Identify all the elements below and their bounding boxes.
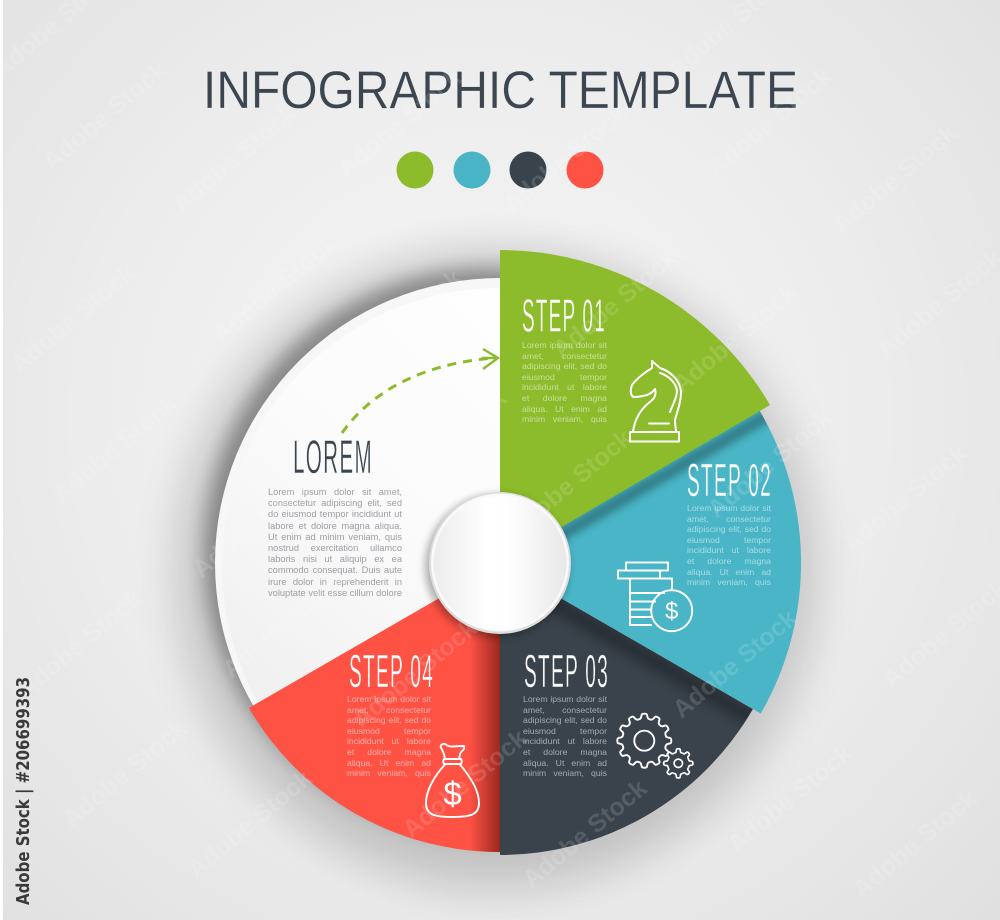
panel: step 04 (249, 598, 500, 852)
watermarks: Adobe Stock (377, 384, 512, 504)
text block: lorem: Lorem ipsum dolor sit amet, (268, 487, 402, 497)
text block: step 01: et dolore magna (522, 393, 607, 403)
text block: step 01: eiusmod tempor (522, 372, 607, 382)
text block: step 01: amet, consectetur (522, 351, 607, 361)
watermarks: Adobe Stock (497, 99, 632, 219)
text block: step 04: minim veniam, quis (347, 768, 431, 778)
watermarks: Adobe Stock (5, 259, 140, 379)
text block: lorem: Ut enim ad minim veniam, quis (268, 532, 402, 542)
text block: step 04: incididunt ut labore (347, 736, 431, 746)
text block: step 01 (522, 340, 607, 427)
watermarks: Adobe Stock (182, 764, 317, 884)
text block: step 03: amet, consectetur (523, 705, 607, 715)
text block: step 01: aliqua. Ut enim ad (522, 404, 607, 414)
title: INFOGRAPHIC TEMPLATE (203, 61, 798, 120)
watermarks: Adobe Stock (667, 279, 802, 399)
text block: step 04: adipiscing elit, sed do (347, 715, 431, 725)
colour dots (396, 152, 604, 188)
watermarks: Adobe Stock (397, 724, 532, 844)
panel: lorem (268, 349, 498, 601)
text block: step 01: adipiscing elit, sed do (522, 361, 607, 371)
text block: step 04: eiusmod tempor (347, 726, 431, 736)
text block: step 04: et dolore magna (347, 747, 431, 757)
text block: step 03: Lorem ipsum dolor sit (523, 694, 607, 704)
text block: step 02: aliqua. Ut enim ad (687, 567, 771, 577)
text block: step 02: minim veniam, quis (687, 577, 771, 587)
wedge: dark (500, 598, 753, 855)
icon: gears (617, 714, 693, 778)
text block: step 03: et dolore magna (523, 747, 607, 757)
panel: step 02: STEP 02 (687, 454, 772, 506)
watermarks: Adobe Stock (47, 389, 182, 509)
stock id label: Adobe Stock | #206699393 (13, 677, 34, 905)
panel: lorem: LOREM (293, 431, 373, 484)
text block: step 01: incididunt ut labore (522, 382, 607, 392)
watermarks: Adobe Stock (547, 244, 682, 364)
text block: step 03: eiusmod tempor (523, 726, 607, 736)
text block: step 02: Lorem ipsum dolor sit (687, 503, 771, 513)
watermarks: Adobe Stock (837, 439, 972, 559)
watermarks: Adobe Stock (702, 404, 837, 524)
icon: coins (618, 562, 692, 631)
text block: step 04 (347, 694, 431, 780)
centre circle (425, 492, 571, 638)
text block: lorem: labore et dolore magna aliqua. (268, 521, 402, 531)
text block: step 04: amet, consectetur (347, 705, 431, 715)
text block: lorem: voluptate velit esse cillum dolore (268, 588, 402, 598)
watermarks: Adobe Stock (12, 584, 147, 704)
wedge: blue (561, 411, 802, 714)
text block: step 02: adipiscing elit, sed do (687, 524, 771, 534)
panel: step 04: STEP 04 (349, 645, 434, 697)
panel: step 02 (561, 411, 802, 714)
watermarks: Adobe Stock (37, 56, 172, 176)
arrow: dashed curve (342, 349, 498, 433)
text block: lorem: irure dolor in reprehenderit in (268, 576, 402, 586)
icon: money bag: $ (443, 775, 462, 812)
text block: lorem: consectetur adipiscing elit, sed (268, 498, 402, 508)
text block: step 03: incididunt ut labore (523, 736, 607, 746)
icon: coins: $ (665, 598, 678, 625)
text block: lorem: commodo consequat. Duis aute (268, 565, 402, 575)
text block: step 02 (687, 503, 771, 589)
icon: chess knight (630, 361, 681, 442)
watermarks: Adobe Stock (217, 564, 352, 684)
text block: step 03: adipiscing elit, sed do (523, 715, 607, 725)
watermarks: Adobe Stock (332, 64, 467, 184)
panel: step 01: STEP 01 (522, 290, 606, 342)
watermarks: Adobe Stock (187, 464, 322, 584)
white disc (215, 278, 785, 848)
text block: lorem (268, 487, 402, 601)
watermarks: Adobe Stock (827, 119, 962, 239)
watermarks: Adobe Stock (502, 424, 637, 544)
watermarks: Adobe Stock (722, 739, 857, 859)
panel: step 03 (500, 598, 753, 855)
text block: step 02: et dolore magna (687, 556, 771, 566)
panel: step 03: STEP 03 (524, 645, 609, 697)
watermarks: Adobe Stock (57, 714, 192, 834)
text block: step 03: minim veniam, quis (523, 768, 607, 778)
text block: step 01: Lorem ipsum dolor sit (522, 340, 607, 350)
text block: step 02: eiusmod tempor (687, 535, 771, 545)
wedge: red (249, 598, 500, 852)
watermarks: Adobe Stock (347, 614, 482, 734)
icon: money bag (426, 744, 479, 817)
watermarks: Adobe Stock (847, 784, 982, 904)
text block: step 02: incididunt ut labore (687, 545, 771, 555)
watermarks: Adobe Stock (207, 229, 342, 349)
watermarks: Adobe Stock (702, 62, 837, 182)
wheel shadows (172, 245, 825, 888)
text block: step 04: aliqua. Ut enim ad (347, 758, 431, 768)
watermarks: Adobe Stock (167, 99, 302, 219)
watermarks: Adobe Stock (517, 774, 652, 894)
text block: step 04: Lorem ipsum dolor sit (347, 694, 431, 704)
text block: step 01: minim veniam, quis (522, 414, 607, 424)
text block: step 02: amet, consectetur (687, 514, 771, 524)
text block: lorem: laboris nisi ut aliquip ex ea (268, 554, 402, 564)
watermarks: Adobe Stock (667, 604, 802, 724)
panel: step 01 (500, 250, 770, 563)
wedge: green (500, 250, 770, 563)
text block: lorem: do eiusmod tempor incididunt ut (268, 509, 402, 519)
text block: lorem: nostrud exercitation ullamco (268, 543, 402, 553)
watermarks: Adobe Stock (332, 264, 467, 384)
text block: step 03 (523, 694, 607, 780)
text block: step 03: aliqua. Ut enim ad (523, 758, 607, 768)
